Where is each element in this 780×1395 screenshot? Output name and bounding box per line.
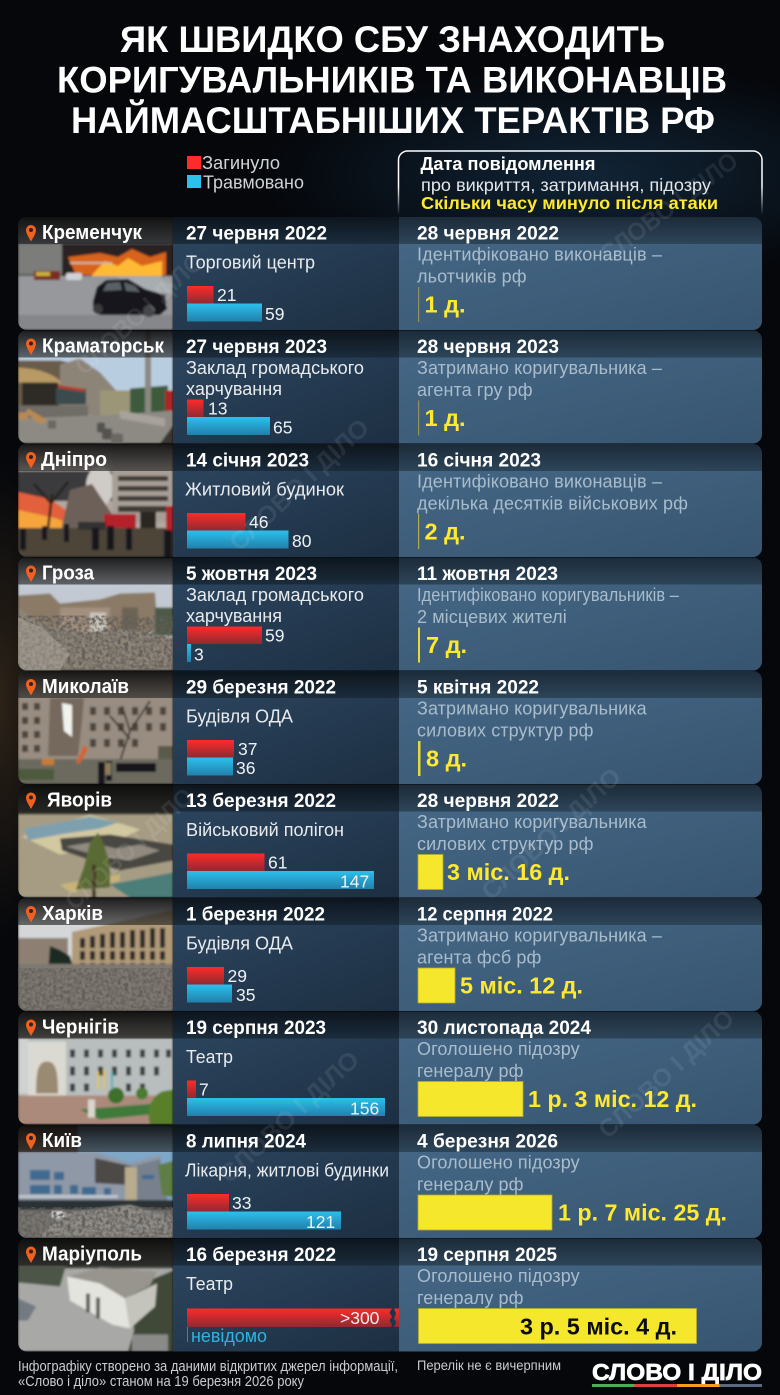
bars: killed and injured: 59 — [265, 304, 284, 324]
row: Київ — [18, 1125, 762, 1238]
legend: killed and injured — [187, 153, 304, 192]
legend box: date of report and elapsed time: Дата повідомлення — [420, 154, 596, 174]
icon: location pin — [26, 906, 36, 922]
city name: Маріуполь — [42, 1244, 142, 1266]
report description: Затримано коригувальника – — [417, 358, 662, 378]
bars: killed and unknown injured: >300 — [340, 1308, 380, 1328]
elapsed time bar: 3 р. 5 міс. 4 д. — [520, 1314, 677, 1340]
city name: Київ — [42, 1130, 82, 1152]
bars: killed and injured — [187, 852, 374, 892]
bars: killed and injured — [187, 1193, 341, 1232]
elapsed time bar: 3 міс. 16 д. — [447, 859, 570, 885]
elapsed time bar — [418, 1195, 727, 1230]
report description: генералу рф — [417, 1061, 524, 1081]
target: Лікарня, житлові будинки — [185, 1160, 389, 1180]
target: Торговий центр — [186, 252, 315, 272]
report description: декілька десятків військових рф — [417, 494, 688, 514]
target: Театр — [186, 1274, 233, 1294]
bars: killed and injured: 13 — [208, 398, 227, 418]
bars: killed and injured: 36 — [236, 758, 255, 778]
bars: killed and injured: 147 — [340, 872, 369, 892]
title: ЯК ШВИДКО СБУ ЗНАХОДИТЬ — [120, 19, 665, 60]
title — [57, 19, 727, 141]
attack date: 14 січня 2023 — [186, 450, 309, 472]
elapsed time bar — [418, 968, 583, 1003]
bars: killed and injured: 29 — [228, 966, 247, 986]
icon: location pin — [26, 338, 36, 355]
photo: Яворів military training ground — [18, 784, 173, 898]
elapsed time bar — [418, 514, 466, 549]
attack date: 13 березня 2022 — [186, 790, 336, 812]
legend box: date of report and elapsed time: Скільки часу минуло після атаки — [421, 193, 718, 213]
target: Будівля ОДА — [186, 706, 293, 726]
target: Заклад громадського — [186, 358, 364, 378]
bars: killed and injured — [187, 626, 284, 664]
bars: killed and injured — [187, 966, 255, 1005]
icon: location pin — [26, 679, 36, 696]
attack date: 16 березня 2022 — [186, 1244, 336, 1266]
report date: 30 листопада 2024 — [417, 1017, 591, 1039]
watermarks: СЛОВО І ДІЛО — [593, 1004, 740, 1144]
target: Театр — [186, 1047, 233, 1067]
elapsed time bar: 1 р. 7 міс. 25 д. — [558, 1200, 727, 1226]
bars: killed and unknown injured — [187, 1308, 399, 1346]
target — [186, 585, 364, 626]
watermarks — [60, 147, 743, 1189]
target: харчування — [186, 379, 282, 399]
report description: Ідентифіковано коригувальників – — [417, 585, 679, 605]
bars: killed and injured: 21 — [217, 285, 236, 305]
photo: Миколаїв regional administration — [18, 671, 173, 784]
target: харчування — [186, 606, 282, 626]
report description: генералу рф — [417, 1288, 524, 1308]
attack date: 8 липня 2024 — [186, 1130, 306, 1152]
elapsed time bar: 1 д. — [424, 292, 466, 318]
watermarks: СЛОВО І ДІЛО — [476, 763, 627, 906]
report date: 4 березня 2026 — [417, 1130, 558, 1152]
logo: Слово і Діло: СЛОВО І ДІЛО — [592, 1359, 762, 1385]
elapsed time bar — [418, 854, 570, 890]
watermarks: СЛОВО І ДІЛО — [595, 147, 743, 268]
title: КОРИГУВАЛЬНИКІВ ТА ВИКОНАВЦІВ — [57, 60, 727, 100]
photo: Чернігів drama theatre — [18, 1012, 173, 1124]
footer: data source note — [18, 1359, 398, 1390]
elapsed time bar: 7 д. — [426, 632, 467, 658]
report description: генералу рф — [417, 1174, 524, 1194]
bars: killed and injured — [187, 739, 257, 778]
bars: killed and injured: 65 — [273, 418, 292, 438]
row: Харків — [18, 898, 762, 1011]
bars: killed and injured — [187, 1080, 385, 1118]
city name: Кременчук — [42, 222, 143, 244]
row: Дніпро — [18, 444, 762, 557]
legend: killed and injured: Травмовано — [203, 172, 304, 192]
title: НАЙМАСШТАБНІШИХ ТЕРАКТІВ РФ — [71, 99, 715, 141]
legend box: date of report and elapsed time — [398, 151, 762, 215]
legend: killed and injured: Загинуло — [202, 153, 280, 173]
target: Заклад громадського — [186, 585, 364, 605]
attack date: 1 березня 2022 — [186, 904, 325, 926]
report description — [417, 698, 648, 740]
attack date: 27 червня 2023 — [186, 336, 327, 358]
target: Військовий полігон — [186, 820, 344, 840]
footer: data source note: Інфографіку створено за даними відкритих джерел інформації, — [18, 1359, 398, 1375]
row: Гроза — [18, 558, 762, 670]
photo: Київ hospital and housing — [18, 1125, 173, 1238]
report description: Затримано коригувальника – — [417, 926, 662, 946]
report date: 5 квітня 2022 — [417, 676, 539, 698]
target: Житловий будинок — [185, 480, 344, 500]
watermarks: СЛОВО І ДІЛО — [60, 783, 199, 916]
city name: Яворів — [47, 790, 112, 812]
elapsed time bar — [418, 287, 466, 322]
city name: Харків — [42, 903, 103, 925]
photo: Харків regional administration — [18, 898, 173, 1011]
icon: location pin — [26, 792, 36, 809]
city name: Дніпро — [41, 449, 107, 471]
attack date: 27 червня 2022 — [186, 222, 327, 244]
bars: killed and unknown injured: невідомо — [191, 1326, 267, 1346]
report description — [417, 1266, 580, 1308]
elapsed time bar — [418, 741, 467, 776]
bars: killed and injured: 35 — [236, 985, 255, 1005]
report description: 2 місцевих жителі — [417, 607, 567, 627]
watermarks: СЛОВО І ДІЛО — [214, 1046, 365, 1189]
report description — [417, 358, 662, 400]
report description — [417, 472, 688, 514]
report description — [417, 244, 662, 286]
icon: location pin — [26, 1133, 36, 1150]
bars: killed and injured — [187, 398, 292, 438]
elapsed time bar: 1 р. 3 міс. 12 д. — [528, 1086, 697, 1112]
report date: 16 січня 2023 — [417, 450, 541, 472]
report description: силових структур рф — [417, 834, 594, 854]
watermarks: СЛОВО І ДІЛО — [70, 248, 209, 381]
report date: 19 серпня 2025 — [417, 1244, 557, 1266]
report description — [417, 585, 679, 627]
city name: Чернігів — [42, 1016, 119, 1038]
legend box: date of report and elapsed time: про викриття, затримання, підозру — [421, 175, 711, 195]
bars: killed and injured — [187, 285, 284, 324]
report description — [417, 926, 662, 968]
report description: Затримано коригувальника — [417, 812, 648, 832]
report description — [417, 1039, 580, 1081]
elapsed time bar — [418, 628, 467, 662]
bars: killed and injured: 121 — [306, 1212, 335, 1232]
row: Миколаїв — [18, 671, 762, 784]
icon: location pin — [26, 1020, 36, 1036]
footer: list not exhaustive note: Перелік не є вичерпним — [417, 1357, 561, 1373]
target: Будівля ОДА — [186, 934, 293, 954]
photo: Маріуполь drama theatre — [18, 1238, 173, 1352]
bars: killed and injured: 37 — [238, 739, 257, 759]
report description: Оголошено підозру — [417, 1039, 580, 1059]
city name: Краматорськ — [42, 336, 165, 358]
report description: льотчиків рф — [417, 266, 527, 286]
row: Кременчук — [18, 217, 762, 330]
bars: killed and injured: 33 — [232, 1193, 251, 1213]
attack date: 29 березня 2022 — [186, 676, 336, 698]
bars: killed and injured: 7 — [199, 1080, 209, 1100]
attack date: 5 жовтня 2023 — [186, 563, 317, 585]
report description — [417, 1152, 580, 1194]
bars: killed and injured: 59 — [265, 626, 284, 646]
row: Маріуполь — [18, 1238, 762, 1352]
report date: 28 червня 2023 — [417, 336, 559, 358]
bars: killed and injured — [187, 512, 312, 551]
photo: Краматорськ restaurant ruins — [18, 330, 173, 446]
bars: killed and injured: 156 — [350, 1098, 379, 1118]
report date: 11 жовтня 2023 — [417, 563, 558, 585]
row: Краматорськ — [18, 330, 762, 446]
elapsed time bar: 5 міс. 12 д. — [460, 972, 583, 998]
elapsed time bar: 2 д. — [424, 518, 466, 544]
report description — [417, 812, 648, 854]
report description: агента фсб рф — [417, 948, 542, 968]
attack date: 19 серпня 2023 — [186, 1017, 326, 1039]
elapsed time bar: 1 д. — [424, 405, 466, 431]
photo: Гроза destroyed cafe — [18, 558, 173, 670]
report description: Затримано коригувальника — [417, 698, 648, 718]
elapsed time bar: 8 д. — [426, 746, 467, 772]
icon: location pin — [26, 452, 36, 468]
city name: Миколаїв — [42, 676, 129, 698]
icon: location pin — [26, 566, 36, 582]
bars: killed and injured: 61 — [268, 852, 287, 872]
report description: силових структур рф — [417, 720, 594, 740]
photo: Кременчук shopping centre fire — [18, 217, 173, 330]
watermarks: СЛОВО І ДІЛО — [224, 414, 375, 557]
report date: 12 серпня 2022 — [417, 904, 553, 926]
bars: killed and injured: 46 — [249, 512, 268, 532]
elapsed time bar — [418, 400, 466, 436]
report description: агента гру рф — [417, 380, 533, 400]
elapsed time bar — [418, 1308, 696, 1344]
elapsed time bar — [418, 1082, 697, 1116]
photo: Дніпро residential building — [18, 444, 173, 557]
report date: 28 червня 2022 — [417, 790, 559, 812]
bars: killed and injured: 80 — [292, 531, 312, 551]
city name: Гроза — [42, 562, 95, 584]
report description: Ідентифіковано виконавців – — [417, 472, 662, 492]
icon: location pin — [26, 1246, 36, 1263]
report description: Ідентифіковано виконавців – — [417, 244, 662, 264]
row: Яворів — [18, 784, 762, 898]
report date: 28 червня 2022 — [417, 222, 559, 244]
report description: Оголошено підозру — [417, 1266, 580, 1286]
footer: data source note: «Слово і діло» станом на 19 березня 2026 року — [18, 1374, 305, 1390]
target — [186, 358, 364, 399]
bars: killed and injured: 3 — [194, 644, 204, 664]
row: Чернігів — [18, 1012, 762, 1124]
report description: Оголошено підозру — [417, 1152, 580, 1172]
icon: location pin — [26, 225, 36, 242]
